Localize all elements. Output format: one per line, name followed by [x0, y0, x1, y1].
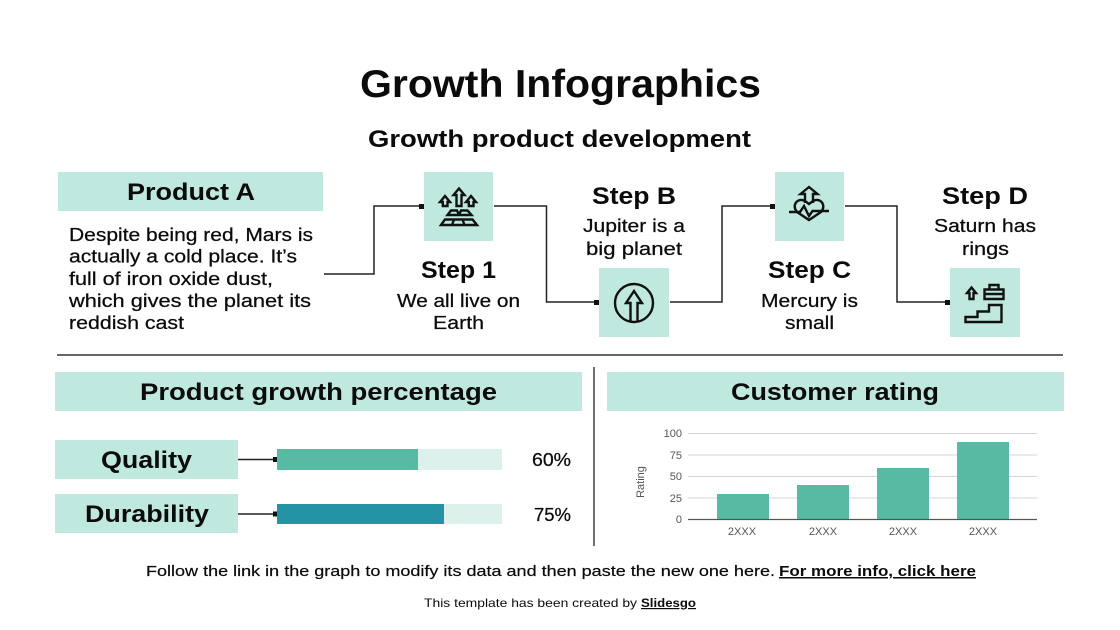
panel: product A: which gives the planet its — [68, 290, 311, 311]
bar chart: 25 — [670, 493, 682, 505]
bar: quality 60%: 60% — [532, 449, 571, 470]
footer note — [146, 563, 976, 580]
panel: step 1: Earth — [433, 312, 484, 333]
subtitle: Growth product development — [368, 126, 751, 153]
panel: step B — [583, 183, 686, 337]
bar: durability 75%: Durability — [85, 501, 210, 528]
panel: product A: Despite being red, Mars is — [69, 224, 313, 245]
bar chart — [635, 428, 1037, 538]
footer note: For more info, click here — [779, 563, 976, 580]
bar: durability 75%: 75% — [534, 504, 571, 525]
bar chart: 75 — [670, 450, 682, 462]
panel: customer rating: Customer rating — [731, 379, 939, 406]
panel: step C: Mercury is — [761, 290, 858, 311]
panel: product A: reddish cast — [69, 312, 184, 333]
footer note: Follow the link in the graph to modify its data and then paste the new one here. — [146, 563, 775, 580]
panel: customer rating — [607, 372, 1064, 538]
bar chart: 100 — [664, 428, 682, 440]
panel: step C — [761, 172, 858, 333]
panel: product A: Product A — [127, 179, 255, 206]
bar chart: 50 — [670, 471, 682, 483]
panel: step D: rings — [962, 238, 1009, 259]
panel: step D: Step D — [942, 183, 1028, 210]
panel: product growth percentage — [55, 372, 582, 533]
panel: step D — [934, 183, 1036, 337]
icon: heart with pulse and arrow — [789, 187, 829, 220]
bar chart: Rating — [635, 466, 647, 498]
panel: step C: Step C — [768, 257, 851, 284]
bar: quality 60% — [55, 440, 571, 479]
panel: step 1: We all live on — [397, 290, 520, 311]
icon: gold bars with arrows — [440, 188, 477, 225]
bar chart: 2XXX — [809, 526, 838, 538]
divider horizontal — [57, 354, 1063, 356]
credit: This template has been created by — [424, 596, 637, 610]
panel: step B: Jupiter is a — [583, 215, 686, 236]
icon: stairs with briefcase and arrow — [966, 285, 1004, 322]
panel: product A: actually a cold place. It’s — [69, 246, 297, 266]
icon: circled up arrow — [615, 284, 653, 322]
panel: product A — [58, 172, 323, 333]
credit — [424, 596, 696, 610]
panel: step C: small — [785, 312, 834, 333]
panel: product growth percentage: Product growth percentage — [140, 379, 497, 406]
panel: step 1 — [397, 172, 520, 333]
panel: step 1: Step 1 — [421, 257, 496, 284]
panel: step B: Step B — [592, 183, 676, 210]
bar chart: 2XXX — [969, 526, 998, 538]
connector arrows — [324, 204, 950, 305]
panel: product A: full of iron oxide dust, — [69, 268, 273, 289]
bar chart: 2XXX — [889, 526, 918, 538]
panel: step B: big planet — [586, 238, 682, 259]
title: Growth Infographics — [360, 63, 761, 106]
divider vertical — [593, 367, 595, 546]
bar chart: 2XXX — [728, 526, 757, 538]
bar chart: 0 — [676, 514, 682, 526]
bar: quality 60%: Quality — [101, 447, 193, 474]
bar: durability 75% — [55, 494, 571, 533]
panel: step D: Saturn has — [934, 215, 1036, 236]
credit: Slidesgo — [641, 596, 696, 610]
